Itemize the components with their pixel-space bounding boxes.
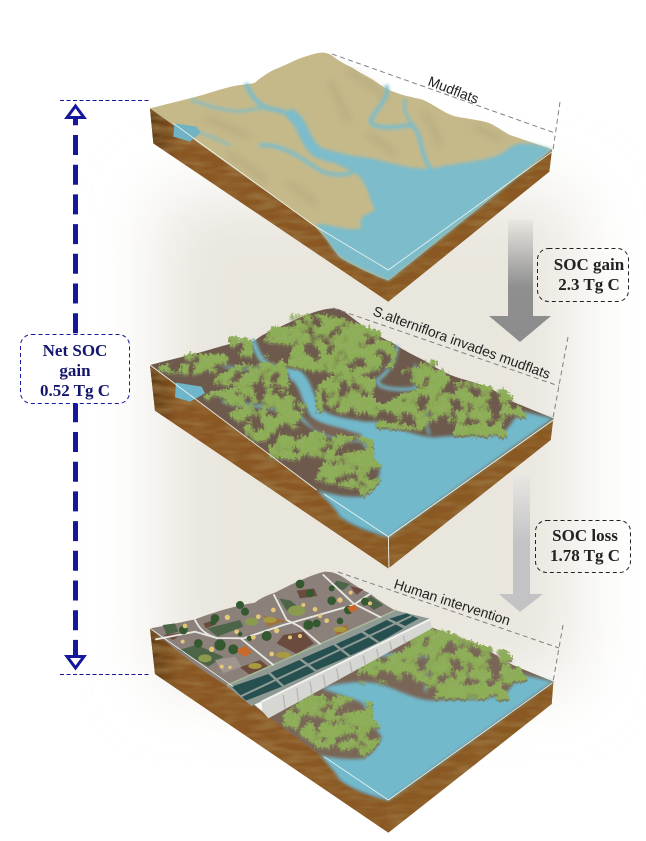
right soil face <box>388 682 553 833</box>
callout: net SOC gain: Net SOC <box>43 341 107 360</box>
houses <box>181 591 372 669</box>
lagoon <box>175 383 205 402</box>
water and channels <box>320 655 553 801</box>
callout: SOC loss: 1.78 Tg C <box>550 546 620 565</box>
net SOC bracket arrow <box>60 100 150 674</box>
sea wall <box>262 619 432 718</box>
water and channels <box>223 342 553 537</box>
water and channels <box>192 85 552 281</box>
right soil face <box>388 149 552 302</box>
orange buildings <box>237 604 358 657</box>
left soil face <box>150 628 388 833</box>
shore edge lines <box>150 365 553 568</box>
block 2: S. alterniflora invasion <box>150 308 553 568</box>
mud surface <box>150 627 553 801</box>
left soil face <box>150 108 388 302</box>
pond <box>173 123 201 142</box>
arrow: SOC loss <box>499 475 543 612</box>
aquaculture ponds <box>227 611 429 705</box>
mud spit <box>303 416 363 442</box>
vegetation <box>285 628 525 754</box>
field plots <box>163 581 383 675</box>
shore edge lines <box>150 628 553 800</box>
right soil face <box>388 418 553 568</box>
left soil face <box>150 365 388 568</box>
trees <box>179 580 369 654</box>
grass strip <box>227 611 397 686</box>
vegetation <box>160 316 525 493</box>
block 1: mudflats <box>150 53 552 302</box>
callout: SOC gain <box>538 248 628 302</box>
roads <box>156 575 381 665</box>
block 3: human intervention <box>150 572 553 833</box>
label: Mudflats: Mudflats <box>426 73 481 107</box>
label: S. alterniflora <box>333 303 568 418</box>
label: Human intervention <box>338 572 563 682</box>
mudflat surface <box>150 53 552 281</box>
crops <box>198 605 347 669</box>
callout: net SOC gain: gain <box>59 361 91 380</box>
shore edge lines <box>173 123 552 270</box>
background glow <box>160 195 575 685</box>
label: Human intervention: Human intervention <box>392 576 512 628</box>
callout: net SOC gain <box>20 334 130 404</box>
label: Mudflats <box>332 54 560 150</box>
callout: SOC gain: SOC gain <box>554 255 625 274</box>
callout: SOC gain: 2.3 Tg C <box>558 275 620 294</box>
city ground <box>150 572 397 687</box>
callout: SOC loss <box>536 520 630 572</box>
arrow: SOC gain <box>489 220 551 342</box>
dark mud surface <box>150 308 553 537</box>
label: S. alterniflora: S.alterniflora invades mudflats <box>371 303 553 382</box>
callout: SOC loss: SOC loss <box>552 526 618 545</box>
valley shading <box>203 70 503 207</box>
callout: net SOC gain: 0.52 Tg C <box>40 381 110 400</box>
